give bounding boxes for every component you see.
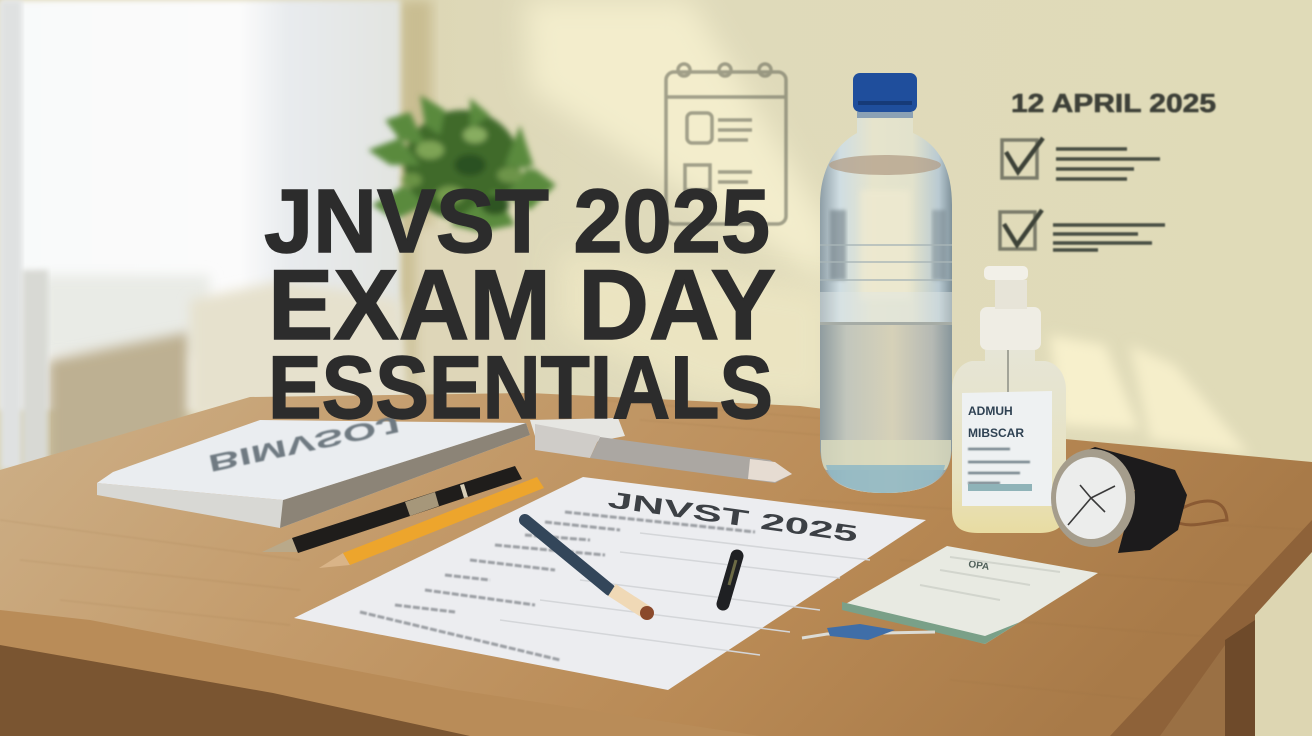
desk [0,393,1312,736]
blue pen [525,520,654,620]
yellow pencil [319,477,544,568]
black marker [723,556,737,604]
exam paper: JNVST 2025 [606,486,860,547]
id card: OPA [968,559,990,573]
water bottle [820,73,952,493]
wall sketch: calendar icon [666,64,786,224]
wall note: checklist [1000,138,1165,250]
title: ESSENTIALS [268,337,773,437]
notebook [97,410,530,528]
title: JNVST 2025 [264,172,770,272]
black pen [262,466,522,553]
notebook: BIMVSOJ [206,410,402,477]
title [264,172,776,437]
title: EXAM DAY [268,249,776,360]
sanitizer bottle: MIBSCAR [968,426,1024,440]
exam paper [294,477,926,690]
window and curtain [0,0,410,470]
wristwatch [1051,447,1227,553]
id card [842,546,1098,644]
pen on notebook edge [530,418,792,483]
clips [802,624,935,640]
plant [368,95,556,395]
sanitizer bottle: ADMUH [968,404,1013,418]
wall note: date: 12 APRIL 2025 [1011,88,1216,118]
sanitizer bottle [952,266,1066,533]
